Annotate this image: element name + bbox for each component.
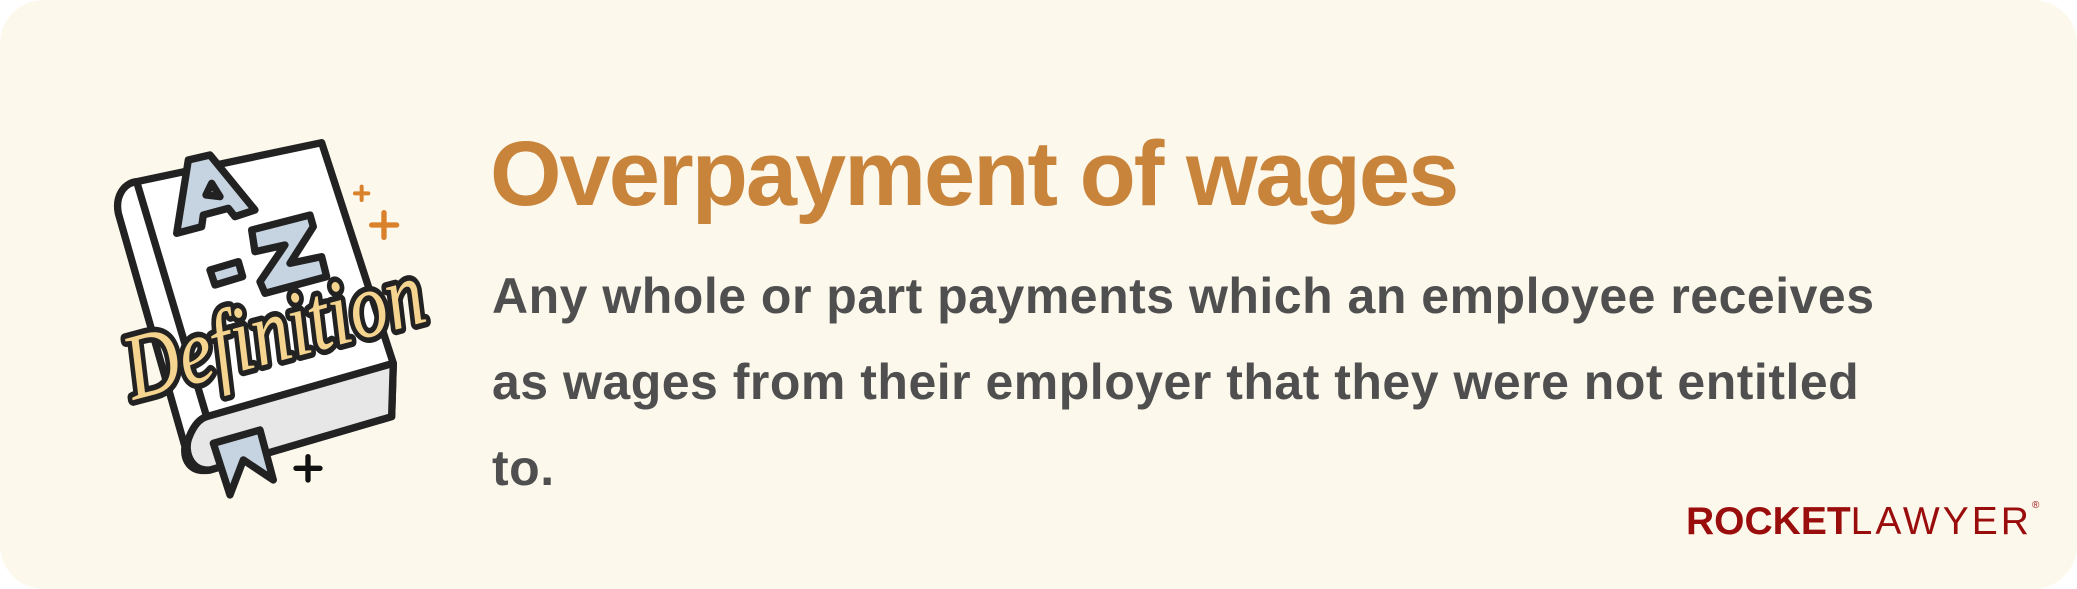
logo: ROCKETLAWYER® xyxy=(1686,500,2040,543)
icon: definition book xyxy=(111,139,435,499)
title: Overpayment of wages xyxy=(490,123,1457,225)
body text: Any whole or part payments which an employee receives as wages from their employer that they were not entitled to. xyxy=(492,268,1875,496)
icon: definition book: Definition xyxy=(111,241,435,421)
